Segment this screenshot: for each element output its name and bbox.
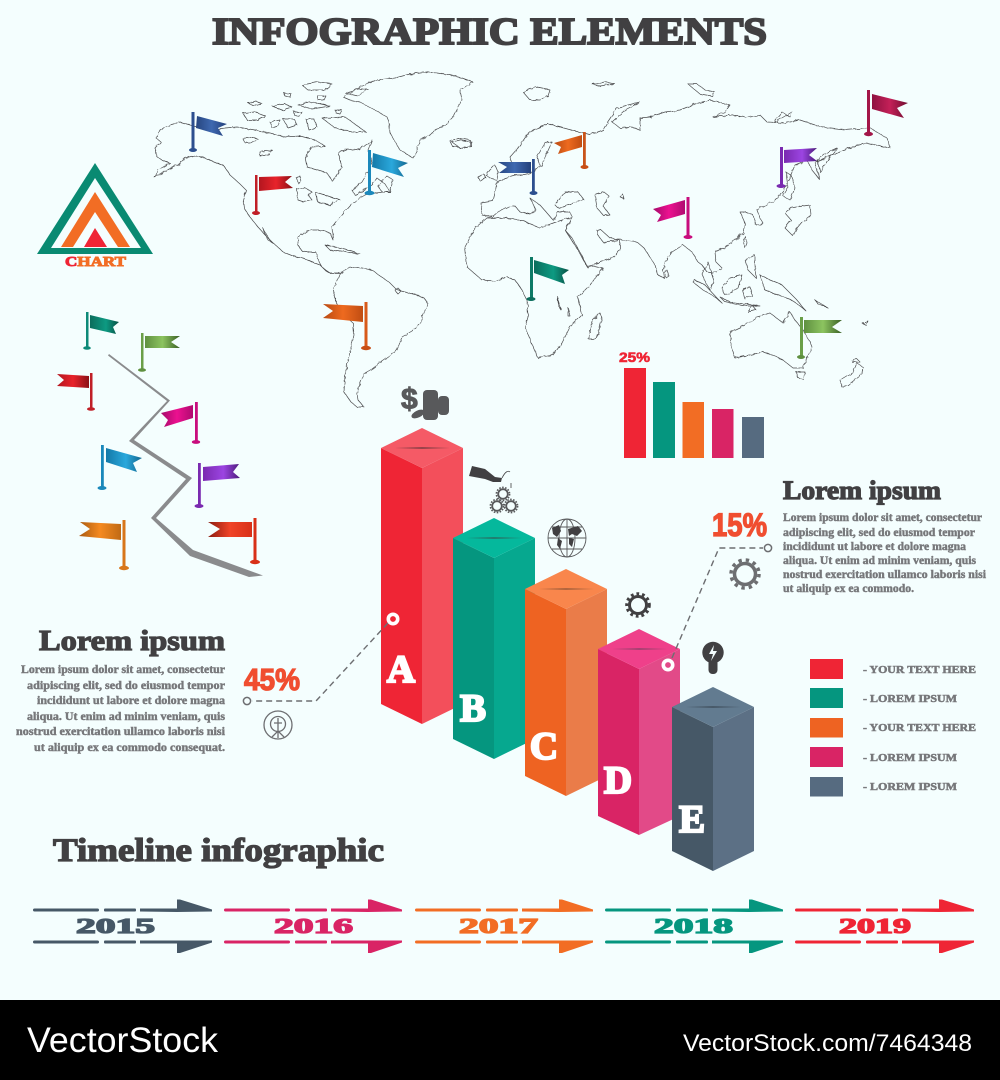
icon: globe [548,519,586,557]
bar letter A: A [387,648,415,691]
icon: coins and dollar: $ [401,383,418,416]
flag: teal, route [83,312,119,350]
legend: - YOUR TEXT HERE [863,664,976,676]
3D bar B [453,518,535,759]
flag: magenta, Asia [653,197,692,239]
flag: purple, route [194,463,240,508]
3D bar E [672,687,754,871]
flag: red-orange, route [208,518,260,564]
winding grey path [108,354,263,577]
footer bar [0,1000,1000,1080]
left body text: aliqua. Ut enim ad minim veniam, quis [27,711,226,723]
callout line 45% [243,614,398,705]
flag: orange, route [79,520,129,570]
left body text: nostrud exercitation ullamco laboris nisi [16,726,226,738]
right text block [783,476,987,595]
timeline 2016: 2016 [274,914,353,938]
legend [810,659,976,796]
15% label: 15% [712,507,767,543]
legend: - LOREM IPSUM [863,781,958,793]
right body text: ut aliquip ex ea commodo. [783,583,914,595]
footer url: VectorStock.com/7464348 [683,1030,972,1057]
3D bar A [381,428,463,724]
timeline 2015 [33,900,212,953]
icon: gear above bar D [627,594,649,616]
legend: - LOREM IPSUM [863,752,958,764]
flag: red, route [57,373,95,411]
icon: coins and dollar [401,383,449,420]
flag: magenta, route [161,402,200,444]
3D bar D [598,629,680,835]
small bar chart [619,350,764,458]
flag: green, Australia [797,317,842,359]
timeline 2019: 2019 [839,914,911,938]
icon: target tree [264,711,292,739]
flag: navy, Europe [498,159,538,195]
flag: red, USA [252,175,293,215]
bar letter C: C [530,725,558,768]
flag: orange, South America [323,302,371,350]
left heading: Lorem ipsum [39,625,225,657]
bar letter E: E [679,798,705,841]
flag: navy, Alaska [189,112,227,152]
legend: - LOREM IPSUM [863,693,958,705]
left body text: ut aliquip ex ea commodo consequat. [34,742,225,754]
left body text: Lorem ipsum dolor sit amet, consectetur [21,664,225,676]
bar letter B: B [460,687,486,730]
legend: - YOUR TEXT HERE [863,722,976,734]
logo: triangle chart [37,163,153,270]
flag: green, route [138,333,180,372]
footer brand: VectorStock [27,1021,219,1060]
right body text: adipiscing elit, sed do eiusmod tempor [783,527,975,539]
flag: orange, Scandinavia [554,132,588,169]
flag: teal, Africa [526,257,569,301]
right body text: aliqua. Ut enim ad minim veniam, quis [783,555,977,567]
icon: bottle and gears [469,466,518,513]
icon: lightbulb [702,642,724,674]
timeline 2015: 2015 [76,914,155,938]
45% label: 45% [244,662,300,697]
flag: blue, Canada [364,150,408,195]
small bar chart: 25% [619,350,650,365]
timeline heading: Timeline infographic [53,833,384,869]
flag: blue, route [98,445,142,490]
title: INFOGRAPHIC ELEMENTS [212,11,767,53]
logo: triangle chart: CHART [65,255,127,270]
flag: crimson, Siberia [864,90,908,136]
right body text: nostrud exercitation ullamco laboris nisi [783,569,987,581]
left body text: incididunt ut labore et dolore magna [37,695,225,707]
right heading: Lorem ipsum [783,476,941,505]
timeline 2018 [605,900,783,953]
right body text: incididunt ut labore et dolore magna [783,541,966,553]
left text block [16,625,226,754]
timeline 2018: 2018 [654,914,733,938]
timeline 2019 [795,900,974,953]
icon: gear beside 15% [731,560,759,588]
left body text: adipiscing elit, sed do eiusmod tempor [27,680,225,692]
world map [154,72,890,407]
timeline 2017 [415,900,593,953]
flag: purple, East Asia [776,147,817,188]
3D bar C [525,569,607,796]
bar letter D: D [604,759,632,802]
left body text [16,664,226,754]
right body text [783,512,987,595]
timeline 2016 [224,900,402,953]
callout line 15% [663,544,772,670]
right body text: Lorem ipsum dolor sit amet, consectetur [783,512,982,524]
timeline 2017: 2017 [459,914,538,938]
